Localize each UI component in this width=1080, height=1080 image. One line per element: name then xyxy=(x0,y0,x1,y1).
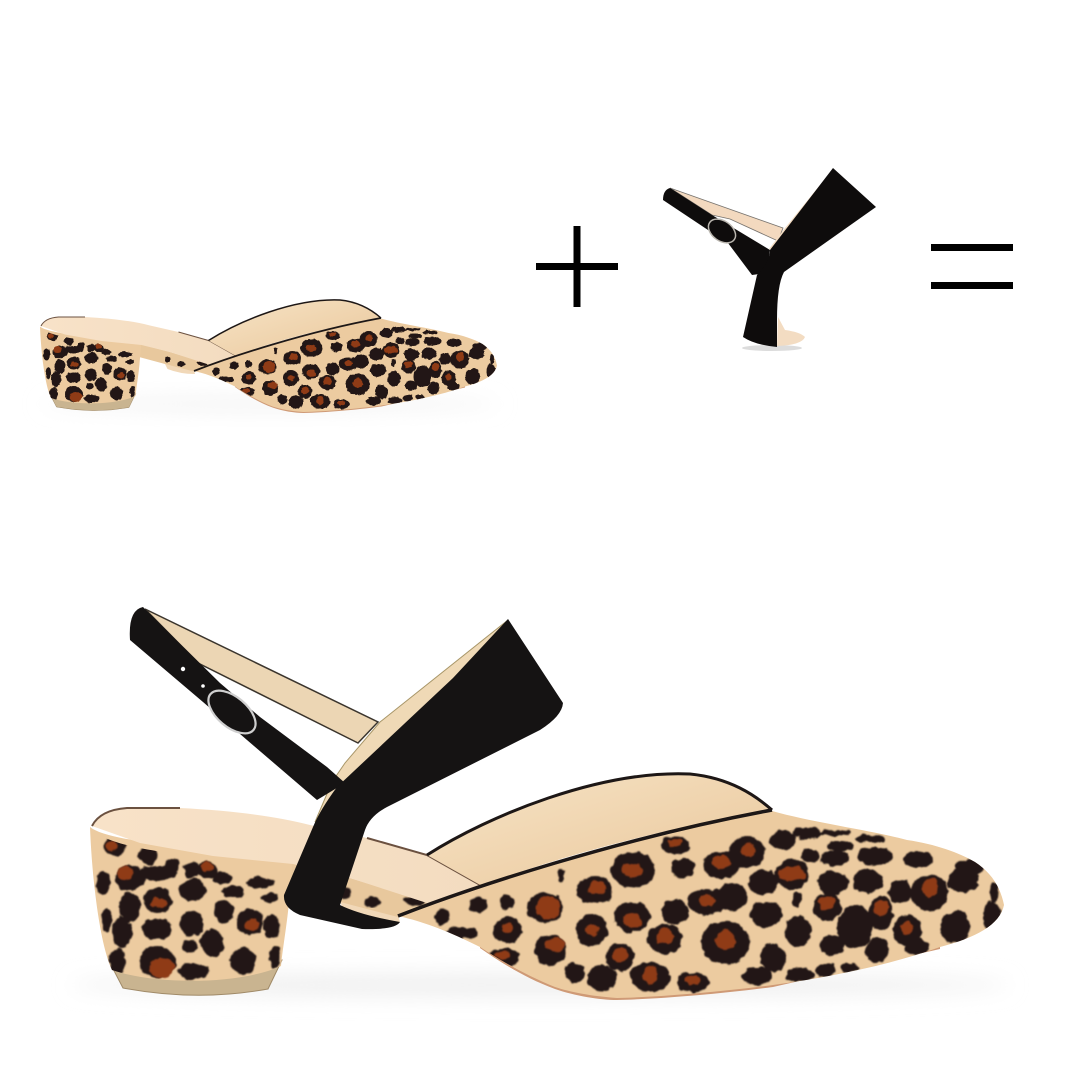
ankle strap xyxy=(663,188,770,275)
wide band lining xyxy=(315,620,510,822)
ankle strap xyxy=(130,607,345,800)
upper lining xyxy=(769,169,836,250)
buckle xyxy=(704,214,740,248)
ankle strap lining xyxy=(145,609,378,743)
plus sign xyxy=(536,226,618,307)
assembled shoe xyxy=(90,607,1004,1000)
insole piece xyxy=(777,317,805,346)
buckle xyxy=(201,683,263,741)
infographic canvas xyxy=(40,168,1013,1000)
equals sign xyxy=(931,244,1013,289)
strap shadow xyxy=(742,345,802,351)
leopard mule xyxy=(90,774,1004,1000)
wide suede band xyxy=(284,619,563,929)
floor shadow: bottom row xyxy=(70,973,1010,997)
floor shadow: top row xyxy=(40,398,500,410)
small leopard mule xyxy=(40,300,497,413)
strap holes xyxy=(181,667,205,688)
black strap accessory xyxy=(663,168,876,351)
wide suede band and heel wrap xyxy=(743,168,876,347)
ankle strap lining xyxy=(670,188,783,241)
